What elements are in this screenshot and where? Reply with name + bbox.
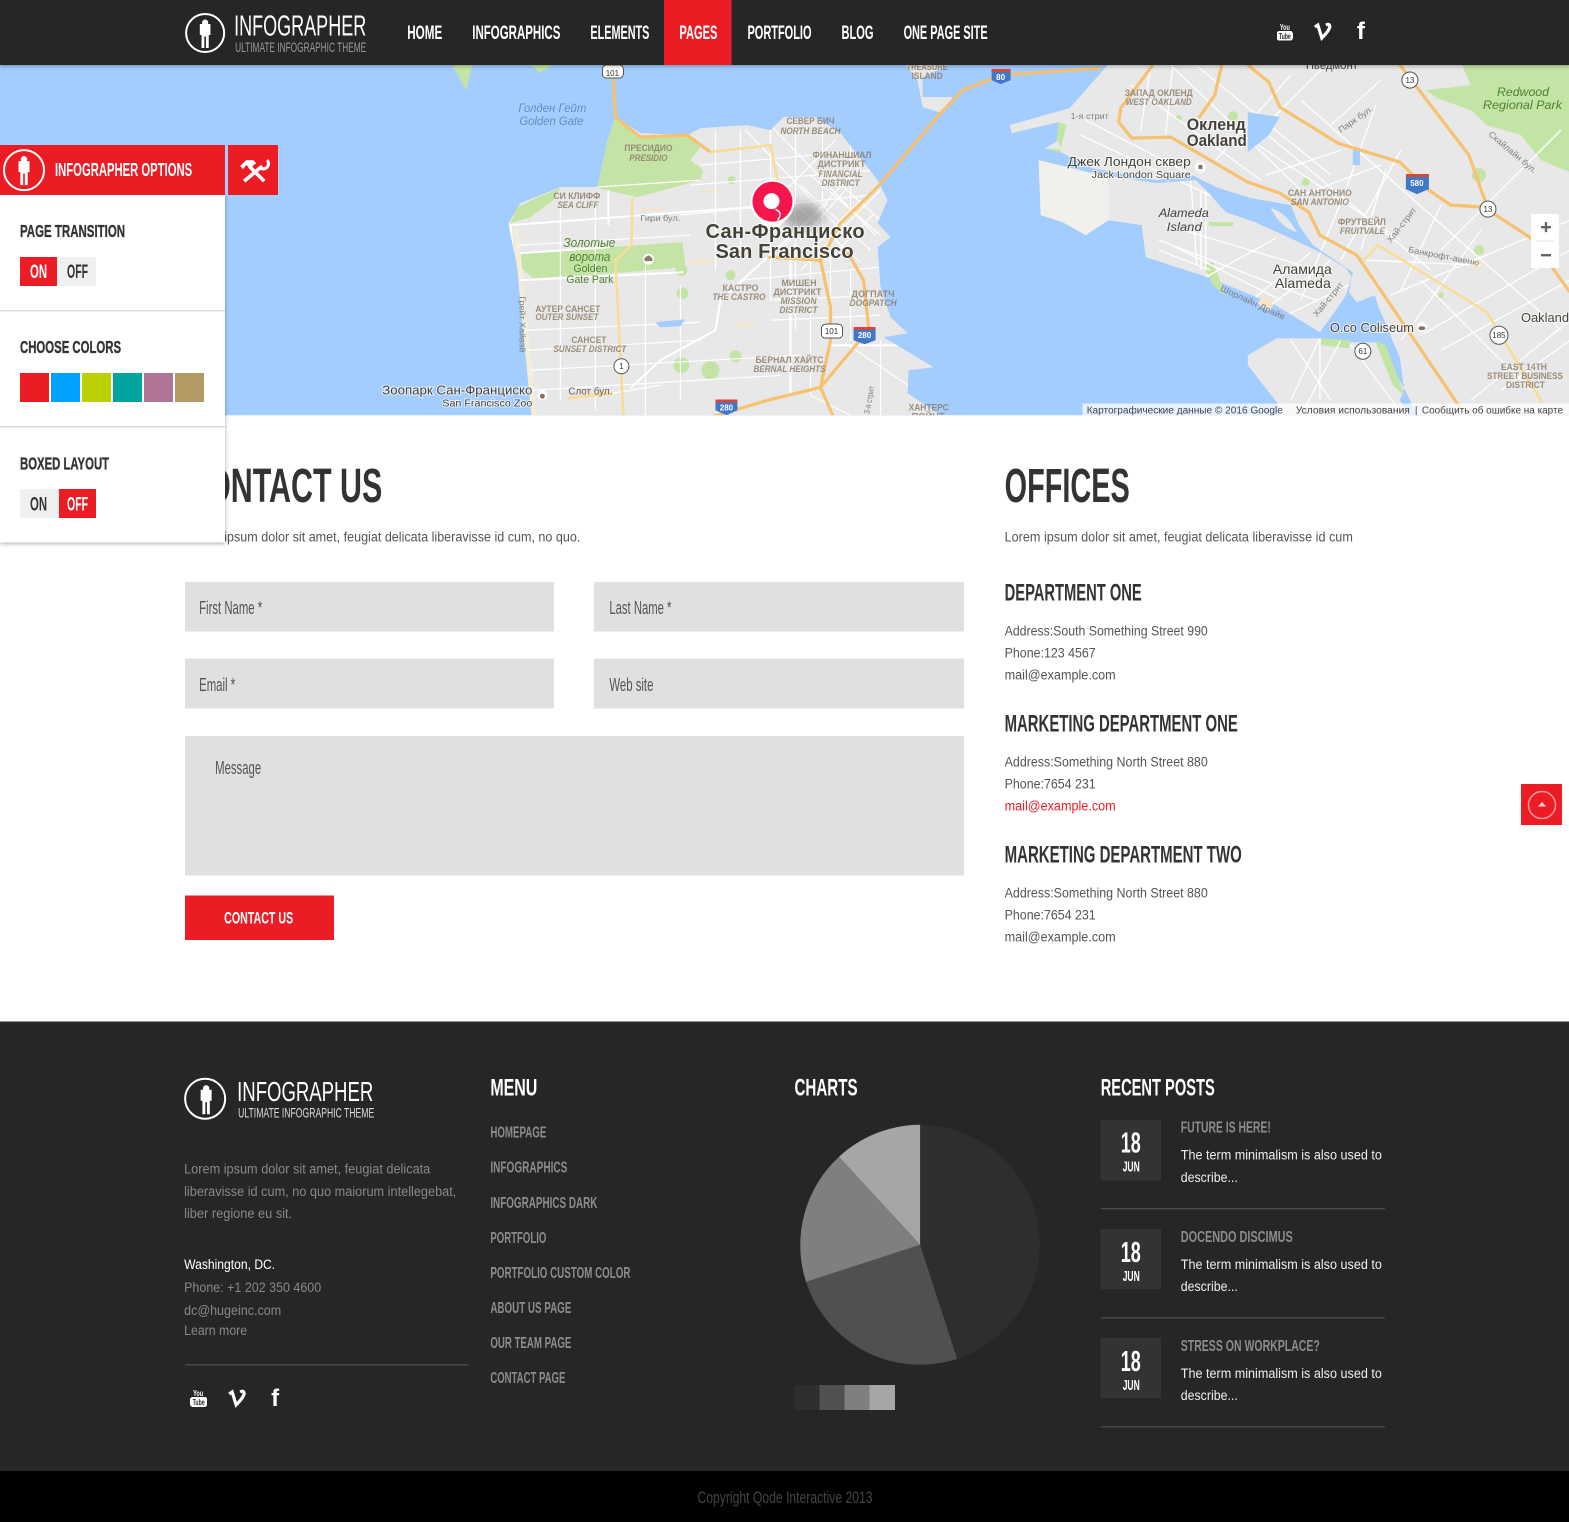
map labels: Банкрофт-авеню	[1408, 244, 1481, 268]
map labels: САН АНТОНИО	[1288, 188, 1352, 199]
post 2: DOCENDO DISCIMUS	[1181, 1229, 1293, 1246]
footer about text: liberavisse id cum, no quo maiorum intellegebat,	[184, 1184, 456, 1199]
post 1	[1101, 1120, 1382, 1185]
map labels: Regional Park	[1483, 98, 1563, 112]
footer logo: ULTIMATE INFOGRAPHIC THEME	[238, 1105, 374, 1121]
map labels: Gate Park	[566, 274, 614, 286]
map attribution: |	[1415, 405, 1418, 416]
map labels: DISTRICT	[1506, 380, 1545, 391]
map labels: THE CASTRO	[712, 292, 766, 303]
map labels: SEA CLIFF	[557, 200, 599, 211]
footer menu: ABOUT US PAGE	[490, 1300, 571, 1317]
map labels: Хай-стрит	[1311, 280, 1345, 319]
map labels: Джек Лондон сквер	[1068, 154, 1191, 169]
map route shields: 13	[1405, 76, 1415, 85]
marketing department two: MARKETING DEPARTMENT TWO	[1005, 842, 1242, 869]
header logo	[186, 11, 366, 55]
recent posts	[1101, 1075, 1385, 1427]
heading: offices: OFFICES	[1005, 460, 1130, 513]
footer menu	[490, 1075, 630, 1387]
map labels: SUNSET DISTRICT	[553, 344, 627, 355]
map labels: ДОГПАТЧ	[852, 289, 895, 300]
department one: Phone:123 4567	[1005, 645, 1096, 660]
page transition option: OFF	[67, 262, 88, 283]
map labels: Шорлайн Драйв	[1219, 283, 1287, 322]
footer logo: INFOGRAPHER	[237, 1076, 373, 1107]
map labels: СЕВЕР БИЧ	[787, 116, 835, 127]
field: web site: Web site	[609, 675, 653, 695]
map route shields: 280	[720, 403, 734, 412]
map labels: Oakland	[1521, 310, 1569, 325]
navigation: BLOG	[842, 22, 874, 44]
post 3: STRESS ON WORKPLACE?	[1181, 1338, 1320, 1355]
map attribution	[1083, 403, 1569, 416]
panel: offices	[1005, 460, 1353, 945]
field: last name	[594, 582, 964, 631]
button: contact us	[185, 896, 334, 940]
map lakes	[655, 112, 1360, 327]
map route shields: 80	[996, 73, 1006, 82]
header social icons: f	[1357, 18, 1366, 45]
header logo: INFOGRAPHER	[234, 11, 366, 43]
map labels: МИШЕН	[781, 278, 817, 289]
map labels: Гири бул.	[640, 213, 680, 223]
options title bar: INFOGRAPHER OPTIONS	[55, 160, 192, 180]
map route shields: 101	[606, 69, 620, 78]
map point of interest icons	[537, 162, 1427, 400]
map labels: Alameda	[1275, 275, 1331, 291]
boxed layout option: BOXED LAYOUT	[20, 453, 109, 473]
footer logo	[185, 1076, 374, 1121]
heading: contact us: CONTACT US	[185, 460, 382, 513]
page transition option: ON	[30, 262, 47, 283]
map labels: ФИНАНШИАЛ	[813, 150, 872, 161]
pie chart	[800, 1125, 1040, 1365]
footer menu: PORTFOLIO CUSTOM COLOR	[490, 1265, 630, 1282]
footer contact details: Phone: +1 202 350 4600	[184, 1280, 321, 1295]
map attribution: Картографические данные © 2016 Google	[1087, 404, 1283, 416]
map labels: 1-я стрит	[1071, 111, 1109, 121]
field: message	[185, 736, 964, 876]
post 2: 18	[1121, 1237, 1141, 1269]
footer menu: CONTACT PAGE	[490, 1370, 565, 1387]
map labels: OUTER SUNSET	[535, 312, 599, 323]
back to top button	[1521, 784, 1562, 825]
map labels: Redwood	[1497, 85, 1549, 99]
department one	[1005, 579, 1208, 682]
field: first name	[185, 582, 554, 631]
post 2: The term minimalism is also used to	[1181, 1257, 1382, 1272]
field: email: Email *	[199, 675, 235, 695]
footer menu: PORTFOLIO	[490, 1230, 546, 1247]
map route shields	[602, 65, 1508, 415]
post 1: The term minimalism is also used to	[1181, 1148, 1382, 1163]
page transition option: PAGE TRANSITION	[20, 221, 125, 241]
map land areas	[508, 65, 1569, 415]
map labels: Oakland	[1187, 131, 1247, 150]
map labels: FINANCIAL	[819, 169, 863, 180]
map route shields: 1	[619, 362, 624, 371]
map labels: NORTH BEACH	[780, 126, 842, 137]
map route shields: 580	[1410, 179, 1424, 188]
map labels: Зоопарк Сан-Франциско	[382, 382, 532, 397]
footer menu: INFOGRAPHICS	[490, 1160, 567, 1177]
map labels: ISLAND	[912, 71, 943, 82]
map labels: Пьедмонт	[1306, 60, 1358, 72]
marketing department one: mail@example.com	[1005, 799, 1116, 814]
button: contact us: CONTACT US	[224, 910, 293, 928]
post 2: JUN	[1123, 1268, 1140, 1285]
choose colors option	[20, 337, 204, 402]
post 3: JUN	[1123, 1377, 1140, 1394]
marketing department two: Phone:7654 231	[1005, 908, 1096, 923]
map labels: BERNAL HEIGHTS	[753, 364, 826, 375]
map labels: 3-я стрит	[862, 385, 876, 415]
map route shields: 101	[825, 327, 839, 336]
map labels: Golden	[573, 263, 607, 275]
post 3: 18	[1121, 1346, 1141, 1378]
tools button	[228, 145, 278, 195]
map labels: ЗАПАД ОКЛЕНД	[1125, 88, 1193, 99]
post 1: 18	[1121, 1128, 1141, 1160]
department one: mail@example.com	[1005, 667, 1116, 682]
footer social icons: You	[193, 1389, 203, 1398]
marketing department one: MARKETING DEPARTMENT ONE	[1005, 710, 1238, 737]
map labels: Скайлайн бул.	[1487, 129, 1539, 175]
map labels: San Francisco Zoo	[442, 397, 533, 409]
navigation	[407, 0, 988, 65]
map labels	[382, 60, 1569, 422]
footer about text: Lorem ipsum dolor sit amet, feugiat delicata	[184, 1162, 431, 1177]
header social icons: You	[1280, 23, 1290, 32]
header bar	[0, 0, 1569, 65]
map pin shadow	[783, 203, 824, 229]
footer menu: OUR TEAM PAGE	[490, 1335, 571, 1352]
map labels: Сан-Франциско	[705, 221, 865, 243]
map labels: Окленд	[1187, 115, 1246, 134]
recent posts: RECENT POSTS	[1101, 1075, 1215, 1102]
marketing department two	[1005, 842, 1242, 945]
map labels: ПРЕСИДИО	[624, 143, 672, 154]
options title bar	[0, 145, 225, 195]
map labels: СИ КЛИФФ	[553, 191, 600, 202]
map labels: Alameda	[1158, 206, 1209, 220]
map labels: Слот бул.	[568, 385, 612, 397]
choose colors option: CHOOSE COLORS	[20, 337, 121, 357]
map labels: САНСЕТ	[571, 335, 607, 346]
footer menu: INFOGRAPHICS DARK	[490, 1195, 598, 1212]
post 3: describe...	[1181, 1388, 1238, 1403]
map parks	[452, 65, 1569, 396]
marketing department two: Address:Something North Street 880	[1005, 886, 1208, 901]
header logo: ULTIMATE INFOGRAPHIC THEME	[235, 40, 366, 55]
page transition option	[20, 221, 125, 286]
map labels: O.co Coliseum	[1330, 320, 1414, 335]
field: first name: First Name *	[199, 598, 262, 618]
map labels: Парк бул.	[1336, 104, 1375, 135]
footer charts heading: CHARTS	[795, 1075, 858, 1102]
map zoom control	[1531, 214, 1559, 268]
map labels: Хай-стрит	[1385, 205, 1418, 244]
map labels: EAST 14TH	[1501, 362, 1547, 373]
pie chart legend	[795, 1385, 895, 1410]
footer social icons: f	[271, 1385, 280, 1412]
footer	[0, 1022, 1569, 1471]
map labels: San Francisco	[715, 241, 854, 263]
map labels: Аламида	[1273, 261, 1332, 277]
map sand and beach tones	[513, 190, 1483, 415]
map attribution: Сообщить об ошибке на карте	[1422, 404, 1563, 416]
map labels: DISTRICT	[779, 305, 819, 316]
post 3	[1101, 1338, 1382, 1403]
post 2: describe...	[1181, 1279, 1238, 1294]
footer contact details	[184, 1257, 321, 1338]
boxed layout option: OFF	[67, 494, 88, 515]
department one: DEPARTMENT ONE	[1005, 579, 1142, 606]
navigation: PAGES	[679, 22, 717, 44]
field: message: Message	[215, 758, 261, 778]
map labels: Golden Gate	[519, 114, 584, 128]
copyright bar: Copyright Qode Interactive 2013	[697, 1489, 873, 1507]
map highways	[612, 65, 1569, 417]
map route shields: 61	[1358, 347, 1368, 356]
navigation: HOME	[407, 22, 442, 44]
post 1: FUTURE IS HERE!	[1181, 1120, 1271, 1137]
map route shields: 185	[1492, 331, 1506, 340]
marketing department one: Phone:7654 231	[1005, 777, 1096, 792]
footer menu: HOMEPAGE	[490, 1125, 546, 1142]
map labels: Island	[1167, 220, 1202, 234]
map labels: ДИСТРИКТ	[818, 159, 866, 170]
map labels: TREASURE	[907, 62, 948, 73]
map labels: SAN ANTONIO	[1291, 197, 1349, 208]
marketing department one: Address:Something North Street 880	[1005, 755, 1208, 770]
marketing department one	[1005, 710, 1238, 814]
map labels: WEST OAKLAND	[1126, 97, 1192, 108]
navigation: INFOGRAPHICS	[472, 22, 560, 44]
copyright bar	[0, 1471, 1569, 1522]
field: web site	[594, 659, 964, 708]
map	[0, 60, 1569, 422]
map attribution: Условия использования	[1296, 405, 1410, 416]
footer contact details: Washington, DC.	[184, 1257, 275, 1272]
map labels: ворота	[569, 249, 610, 264]
footer social icons: Tube	[193, 1398, 205, 1407]
footer social icons	[190, 1385, 280, 1412]
post 2	[1101, 1229, 1382, 1294]
navigation: ONE PAGE SITE	[904, 22, 988, 44]
map labels: Голден Гейт	[518, 101, 586, 115]
footer contact details: Learn more	[184, 1323, 247, 1338]
panel: contact form	[185, 460, 964, 940]
offices intro text: Lorem ipsum dolor sit amet, feugiat delicata liberavisse id cum	[1005, 529, 1353, 544]
navigation: PORTFOLIO	[747, 22, 812, 44]
marketing department two: mail@example.com	[1005, 930, 1116, 945]
map labels: Jack London Square	[1092, 169, 1191, 181]
map labels: Золотые	[563, 235, 615, 250]
map labels: DOGPATCH	[850, 298, 898, 309]
boxed layout option: ON	[30, 494, 47, 515]
map labels: PRESIDIO	[629, 153, 668, 164]
map labels: FRUITVALE	[1340, 226, 1385, 237]
map labels: ДИСТРИКТ	[773, 287, 822, 298]
map labels: АУТЕР САНСЕТ	[535, 304, 601, 315]
map route shields: 280	[858, 331, 872, 340]
header social icons: Tube	[1279, 32, 1291, 41]
map labels: ПОЙНТ	[912, 410, 945, 422]
map route shields: 13	[1483, 205, 1493, 214]
field: last name: Last Name *	[609, 598, 671, 618]
panel: infographer options	[0, 145, 278, 542]
boxed layout option	[20, 453, 109, 518]
footer about text	[184, 1162, 456, 1221]
contact intro text: Lorem ipsum dolor sit amet, feugiat delicata liberavisse id cum, no quo.	[185, 529, 580, 544]
map labels: ХАНТЕРС	[909, 402, 949, 413]
map labels: MISSION	[780, 296, 818, 307]
header social icons	[1277, 18, 1366, 45]
field: email	[185, 659, 554, 708]
map labels: DISTRICT	[822, 178, 861, 189]
map roads	[510, 65, 1569, 415]
post 1: JUN	[1123, 1159, 1140, 1176]
footer about text: liber regione eu sit.	[184, 1206, 292, 1221]
navigation: ELEMENTS	[590, 22, 649, 44]
footer contact details: dc@hugeinc.com	[184, 1303, 281, 1318]
map labels: КАСТРО	[722, 283, 758, 294]
post 3: The term minimalism is also used to	[1181, 1366, 1382, 1381]
footer menu: MENU	[490, 1075, 537, 1102]
map pin	[750, 180, 795, 233]
map labels: БЕРНАЛ ХАЙТС	[755, 354, 824, 366]
map labels: ФРУТВЕЙЛ	[1338, 216, 1386, 228]
map labels: Грейт Хайвэй	[517, 296, 527, 352]
department one: Address:South Something Street 990	[1005, 623, 1208, 638]
post 1: describe...	[1181, 1170, 1238, 1185]
